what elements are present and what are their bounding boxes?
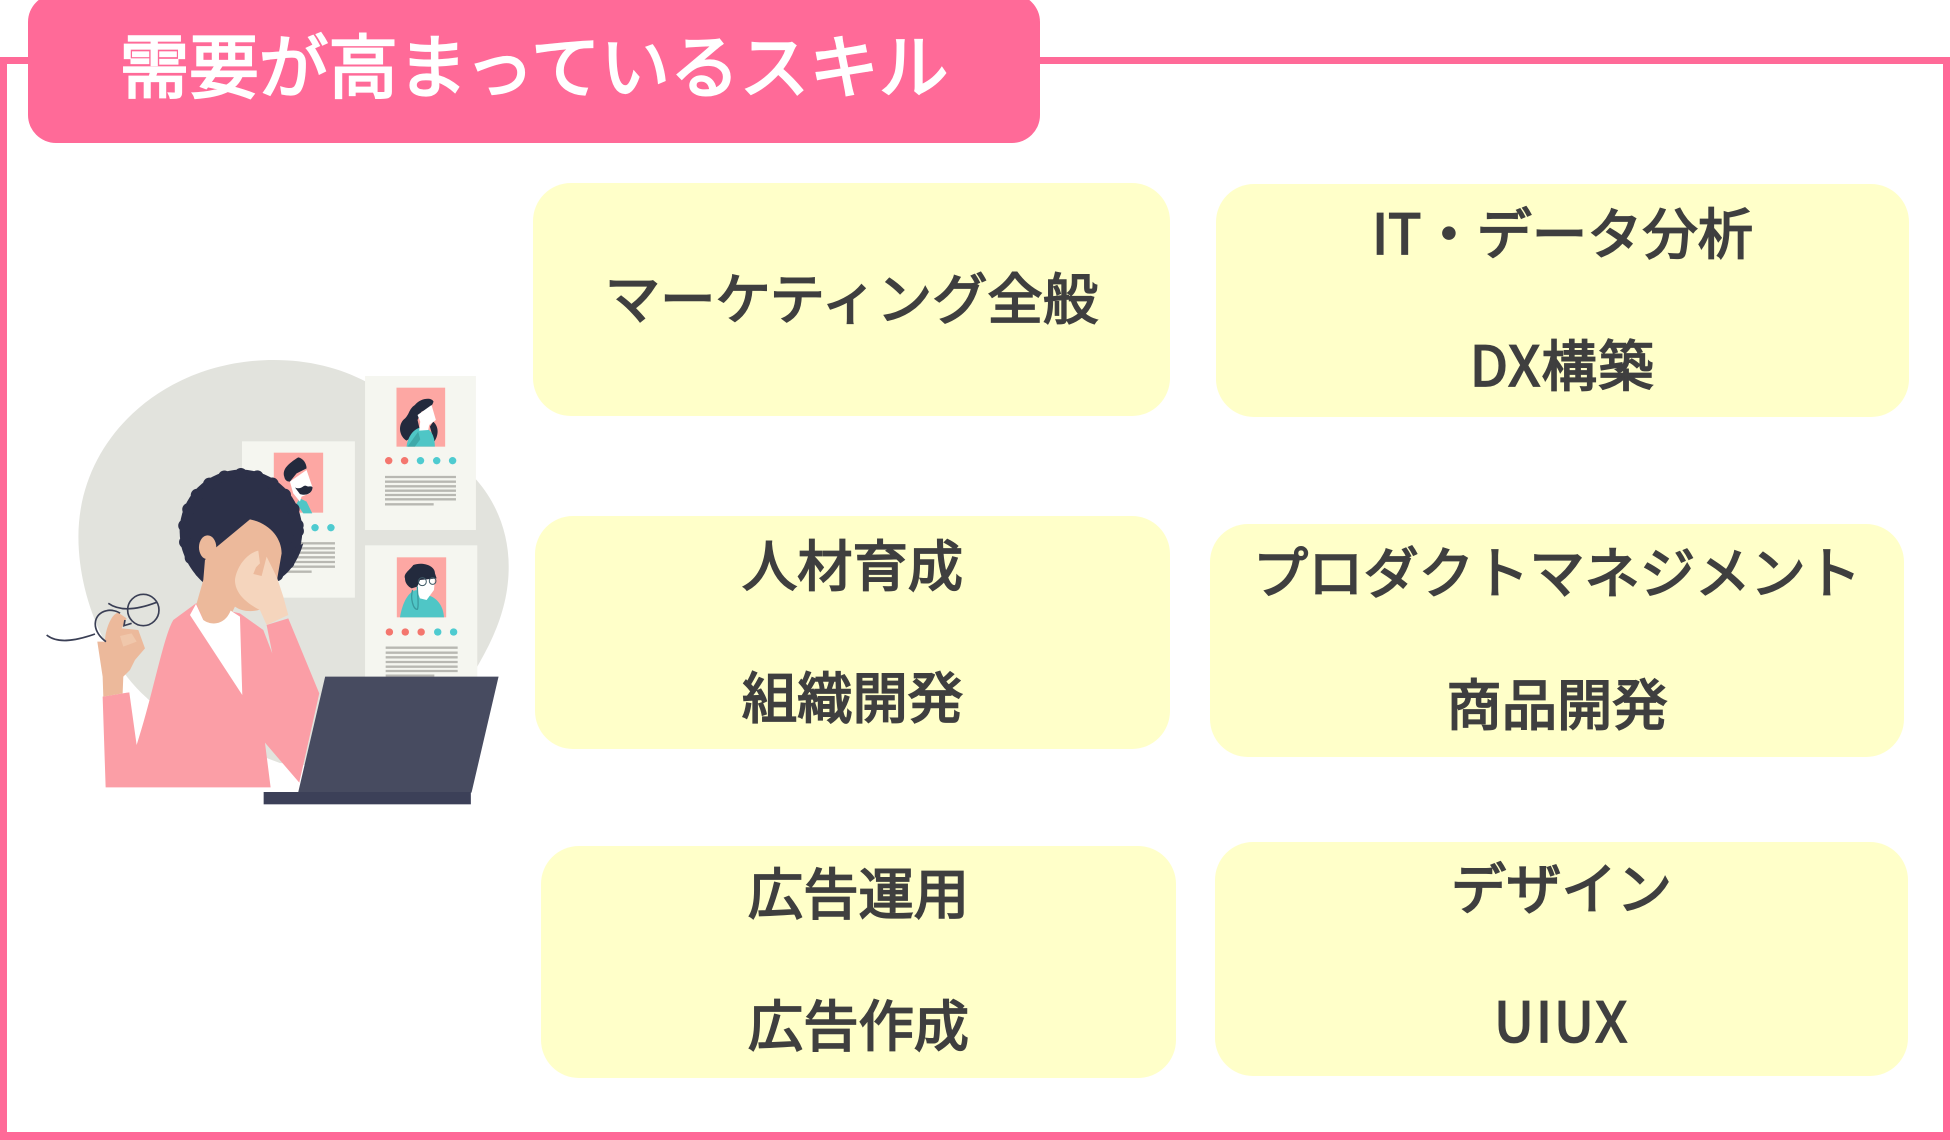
profile card: middle xyxy=(242,441,355,598)
label: IT data analysis: IT・データ分析 xyxy=(1372,190,1753,270)
grey background blob xyxy=(78,360,509,773)
person xyxy=(47,470,319,792)
hand holding glasses xyxy=(97,613,145,697)
label: UIUX: UIUX xyxy=(1494,978,1629,1058)
white shirt slivers xyxy=(123,677,147,745)
skill card: design xyxy=(1215,842,1908,1076)
label: product development: 商品開発 xyxy=(1446,661,1668,741)
profile card: bottom right xyxy=(365,545,477,679)
sweater xyxy=(103,603,319,787)
laptop xyxy=(264,677,499,804)
label: DX: DX構築 xyxy=(1470,322,1655,402)
title banner: 需要が高まっているスキル xyxy=(120,12,948,113)
profile card: top right xyxy=(365,376,476,530)
label: product management: プロダクトマネジメント xyxy=(1253,529,1861,609)
illustration: tired person at laptop with candidate profiles xyxy=(46,360,509,804)
label: marketing: マーケティング全般 xyxy=(605,255,1098,335)
title banner xyxy=(28,0,1040,143)
skill card: HR xyxy=(535,516,1170,749)
label: ad operation: 広告運用 xyxy=(748,850,969,930)
skill card: product xyxy=(1210,524,1904,757)
ear xyxy=(199,535,216,559)
skill card: marketing xyxy=(533,183,1170,416)
label: talent development: 人材育成 xyxy=(742,522,963,602)
skill card: IT and DX xyxy=(1216,184,1909,417)
label: ad creation: 広告作成 xyxy=(748,982,969,1062)
hair xyxy=(180,470,303,592)
neck and face xyxy=(197,519,282,624)
glasses xyxy=(47,594,159,642)
white shirt collar xyxy=(190,604,242,695)
hand on face xyxy=(235,551,288,625)
label: design: デザイン xyxy=(1451,845,1672,925)
skill card: advertising xyxy=(541,846,1176,1078)
label: organization development: 組織開発 xyxy=(742,654,963,734)
